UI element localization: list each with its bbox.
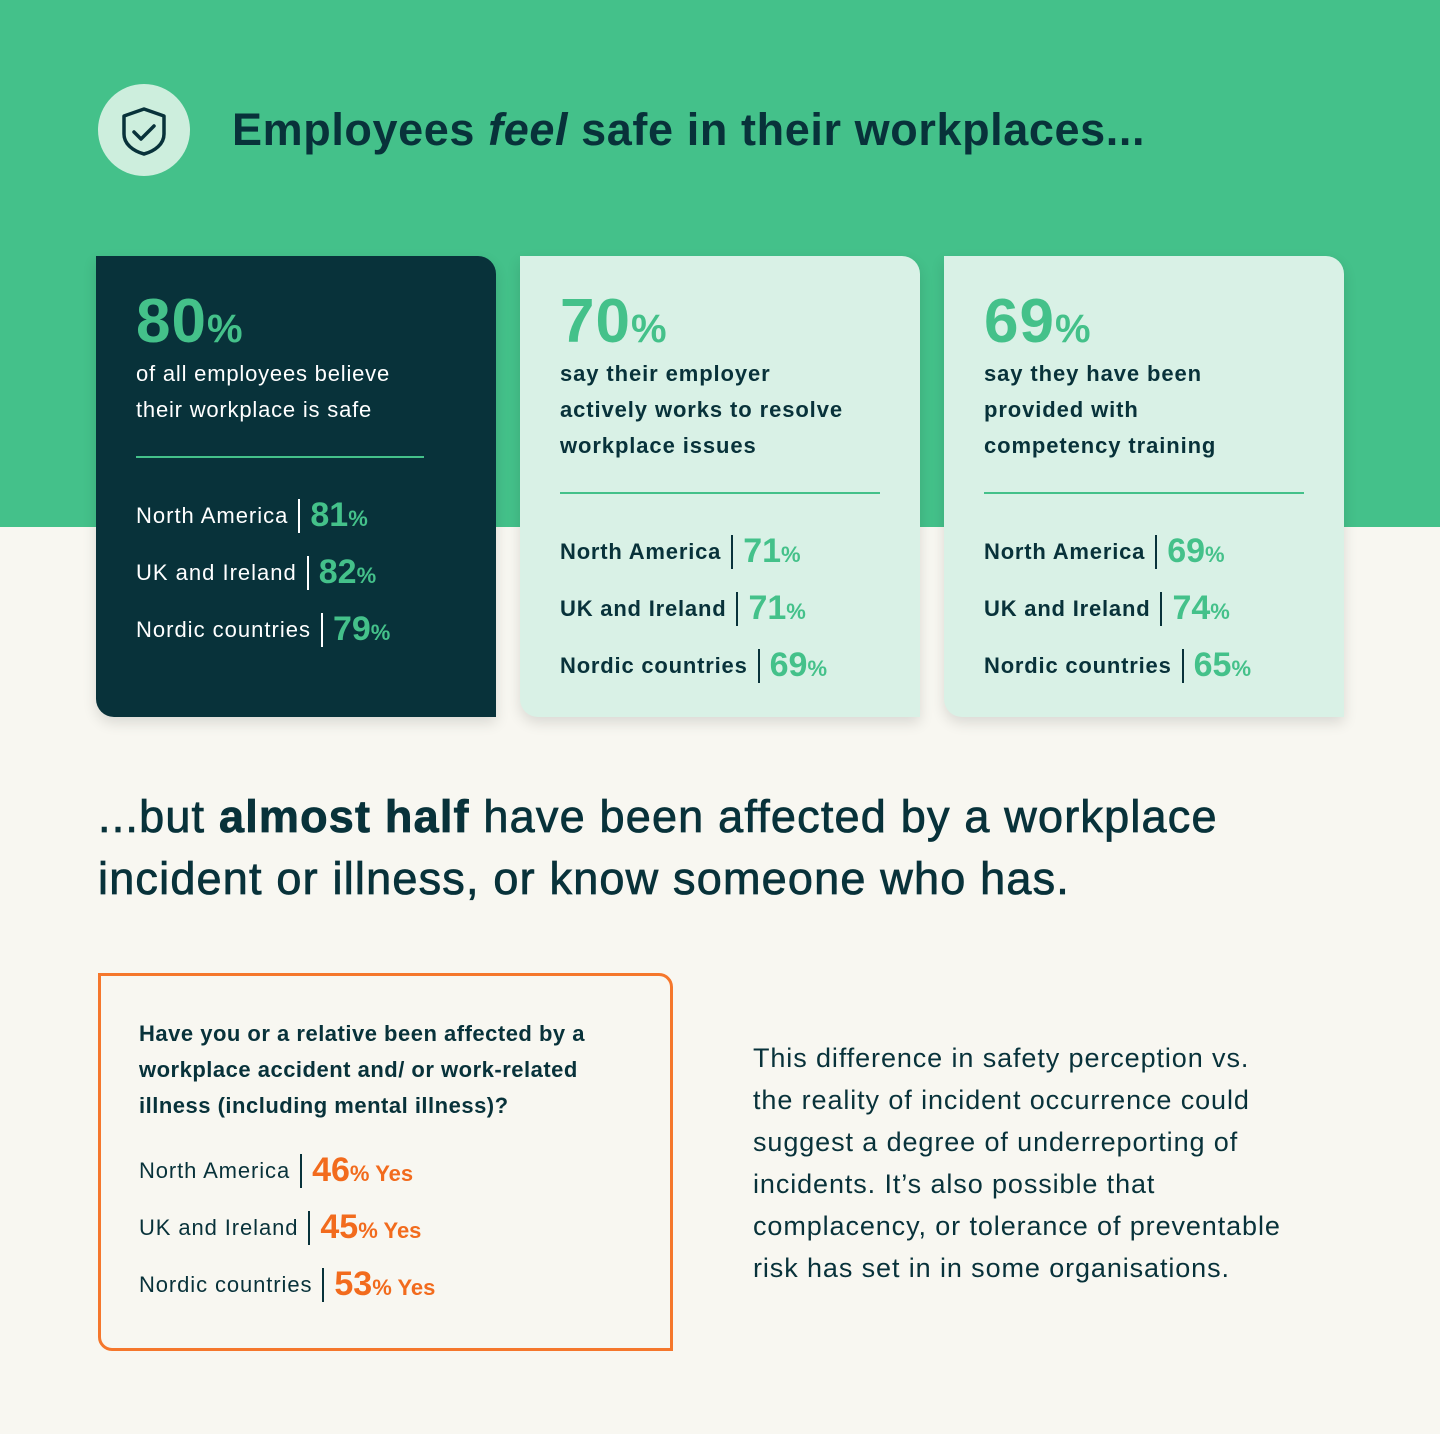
panel: 80% — [96, 256, 496, 717]
answers — [139, 1151, 435, 1303]
panel: 69%: UK and Ireland — [984, 596, 1150, 620]
text block: explanation: suggest a degree of underreporting of — [753, 1127, 1238, 1157]
question text: illness (including mental illness)? — [139, 1093, 509, 1118]
text block: explanation: risk has set in in some organisations. — [753, 1253, 1230, 1283]
panel: 69%: 69% — [984, 287, 1092, 356]
answers: 45% Yes — [320, 1208, 421, 1246]
answers: UK and Ireland — [139, 1214, 298, 1240]
answers: Nordic countries — [139, 1272, 312, 1296]
panel: 80%: North America — [136, 502, 288, 528]
panel: 69%: 65% — [1194, 646, 1251, 684]
text block: explanation: the reality of incident occurrence could — [753, 1085, 1250, 1115]
panel: question box — [98, 973, 673, 1351]
panel: 80%: 82% — [319, 553, 376, 591]
panel: 80%: their workplace is safe — [136, 397, 372, 422]
subheading — [98, 791, 1218, 904]
panel: 69%: provided with — [984, 397, 1139, 422]
green header band — [0, 0, 1440, 527]
panel: 70%: UK and Ireland — [560, 596, 726, 620]
panel: 69% — [944, 256, 1344, 717]
panel: 70%: 70% — [560, 287, 668, 356]
panel: 80%: of all employees believe — [136, 361, 390, 386]
panel: 70%: say their employer — [560, 361, 771, 386]
panel: 70%: 71% — [743, 532, 801, 570]
panel: 70%: workplace issues — [560, 433, 757, 458]
icon: shield check — [98, 84, 190, 176]
subheading: incident or illness, or know someone who has. — [98, 853, 1070, 904]
question text: Have you or a relative been affected by a — [139, 1021, 585, 1046]
answers: 53% Yes — [334, 1265, 435, 1303]
panel: 80%: 79% — [333, 610, 390, 648]
panel: 69%: 69% — [1167, 532, 1225, 570]
panel: 69%: Nordic countries — [984, 652, 1172, 678]
answers: North America — [139, 1158, 290, 1182]
panel: 69%: North America — [984, 538, 1145, 564]
panel: 70% — [520, 256, 920, 717]
text block: explanation: incidents. It’s also possible that — [753, 1169, 1155, 1199]
panel: 70%: North America — [560, 538, 721, 564]
text block: explanation — [753, 1043, 1281, 1283]
question text: workplace accident and/ or work-related — [139, 1057, 578, 1082]
title: Employees feel safe in their workplaces... — [232, 104, 1145, 155]
subheading: ...but almost half have been affected by a workplace — [98, 791, 1218, 842]
panel: 70%: 71% — [748, 589, 806, 627]
panel: 70%: Nordic countries — [560, 652, 748, 678]
panel: 69%: say they have been — [984, 361, 1202, 386]
text block: explanation: complacency, or tolerance of preventable — [753, 1211, 1281, 1241]
panel: 80%: UK and Ireland — [136, 560, 297, 584]
panel: 80%: Nordic countries — [136, 616, 311, 642]
question text — [139, 1021, 585, 1118]
panel: 80%: 81% — [310, 496, 368, 534]
text block: explanation: This difference in safety perception vs. — [753, 1043, 1249, 1073]
panel: 69%: competency training — [984, 433, 1216, 458]
panel: 70%: 69% — [770, 646, 827, 684]
panel: 80%: 80% — [136, 287, 244, 356]
answers: 46% Yes — [312, 1151, 413, 1189]
panel: 69%: 74% — [1172, 589, 1230, 627]
panel: 70%: actively works to resolve — [560, 397, 843, 422]
